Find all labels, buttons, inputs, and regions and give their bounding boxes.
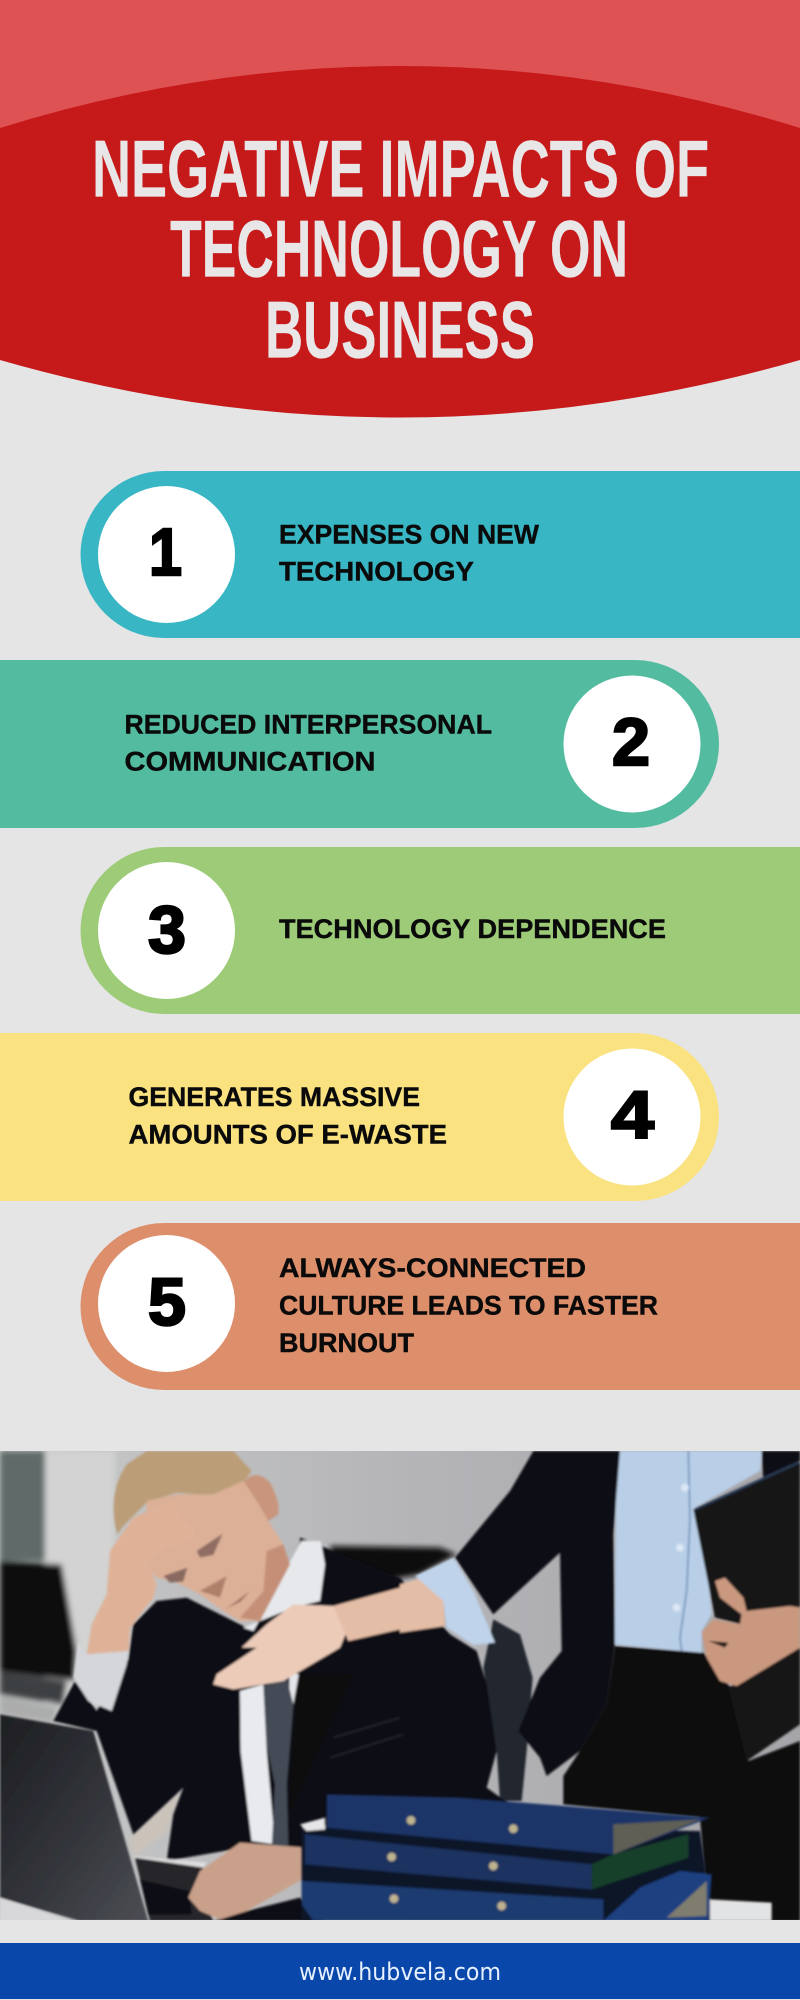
item 5: always-connected culture: CULTURE LEADS TO FASTER <box>279 1290 658 1320</box>
item 5: always-connected culture <box>81 1223 800 1390</box>
item 3: technology dependence: TECHNOLOGY DEPENDENCE <box>279 914 666 944</box>
woman's forearm and open hand <box>213 1604 348 1689</box>
item 3: technology dependence <box>81 847 800 1014</box>
item 1: expenses on new technology: EXPENSES ON NEW <box>279 520 539 550</box>
item 4: generates massive e-waste: 4 <box>611 1078 654 1153</box>
face <box>143 1481 290 1621</box>
woman's skirt <box>563 1646 800 1921</box>
woman's cuff <box>415 1558 495 1645</box>
item 5: always-connected culture: 5 <box>148 1265 186 1340</box>
item 5: always-connected culture: BURNOUT <box>279 1328 414 1358</box>
website url: www.hubvela.com <box>299 1958 501 1986</box>
laptop base <box>135 1858 213 1921</box>
ear <box>243 1475 279 1521</box>
shirt buttons <box>673 1484 689 1612</box>
man's tie <box>263 1678 293 1848</box>
folder <box>693 1463 800 1624</box>
man's hand on head <box>86 1512 158 1655</box>
item 1: expenses on new technology <box>81 471 800 638</box>
item 4: generates massive e-waste: AMOUNTS OF E-WASTE <box>128 1120 447 1150</box>
photo: stressed businessman and colleague <box>0 1451 800 1921</box>
title <box>92 124 709 376</box>
man's hand on laptop <box>213 1898 323 1921</box>
woman's shirt <box>615 1451 762 1653</box>
man's suit <box>53 1538 510 1861</box>
item 2: reduced interpersonal communication: REDUCED INTERPERSONAL <box>124 710 492 740</box>
item 1: expenses on new technology: TECHNOLOGY <box>279 556 474 586</box>
title: BUSINESS <box>265 286 535 376</box>
man's shirt <box>243 1541 325 1631</box>
woman's jacket <box>455 1451 620 1776</box>
item 2: reduced interpersonal communication: COMMUNICATION <box>124 746 376 776</box>
man's cuff <box>73 1641 128 1711</box>
item 5: always-connected culture: ALWAYS-CONNECTED <box>279 1253 586 1283</box>
chair back <box>483 1619 533 1801</box>
item 2: reduced interpersonal communication: 2 <box>612 705 650 780</box>
woman's hand on folder <box>702 1578 800 1686</box>
item 1: expenses on new technology: 1 <box>149 515 182 590</box>
footer band <box>0 1943 800 1999</box>
laptop screen <box>0 1714 148 1921</box>
item 2: reduced interpersonal communication <box>0 660 719 828</box>
header band <box>0 0 800 418</box>
woman's forearm <box>400 1578 445 1633</box>
desk <box>0 1898 70 1921</box>
item 3: technology dependence: 3 <box>148 893 186 968</box>
binders <box>300 1794 772 1921</box>
item 4: generates massive e-waste <box>0 1033 719 1201</box>
hair <box>114 1451 252 1534</box>
item 4: generates massive e-waste: GENERATES MASSIVE <box>128 1082 420 1112</box>
